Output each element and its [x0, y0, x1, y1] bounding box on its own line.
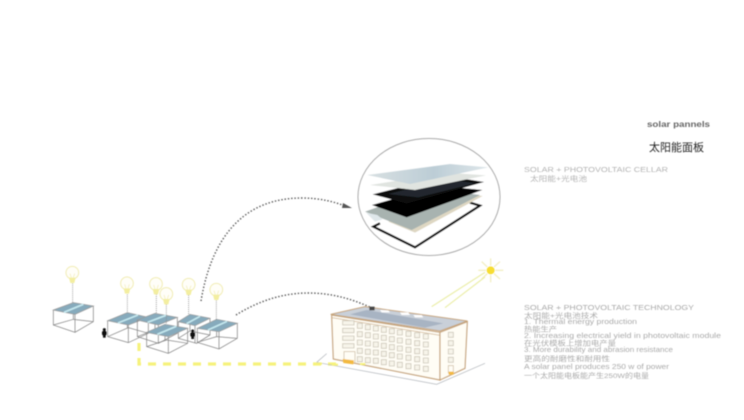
ground outline [317, 354, 485, 384]
layer: back frame [373, 203, 480, 247]
pavilion 4 [178, 291, 210, 343]
layer: glass top [367, 164, 488, 184]
text block: photovoltaic technology: 太阳能+光电池技术 [524, 311, 598, 320]
text block: photovoltaic technology: 更高的耐磨性和耐用性 [524, 354, 610, 363]
text block: photovoltaic cellar: 太阳能+光电池 [530, 174, 587, 183]
pavilion 6 [197, 300, 237, 349]
light bulbs [66, 266, 223, 304]
building with rooftop solar panels [316, 307, 485, 384]
building side facade [440, 322, 467, 380]
text block: photovoltaic technology: SOLAR + PHOTOVOLTAIC TECHNOLOGY [524, 303, 694, 312]
parapet line [332, 318, 440, 335]
text block: photovoltaic technology: A solar panel produces 250 w of power [524, 362, 670, 371]
layer: black cell 3 [372, 186, 482, 217]
windows [343, 321, 453, 371]
pavilion 3 [137, 290, 177, 343]
layer: tan backing [388, 192, 483, 233]
pavilion 1 [53, 283, 93, 332]
building roof [331, 307, 467, 331]
layer: pale sheet [370, 173, 486, 190]
layer: grey sheet [365, 188, 480, 230]
title: solar panels: 太阳能面板 [649, 140, 704, 154]
circle outline of exploded solar panel [358, 138, 500, 256]
exploded solar panel layers [365, 164, 488, 247]
pavilion 2 [108, 292, 148, 343]
pavilion 5 [147, 304, 188, 353]
doors [344, 352, 453, 373]
rooftop unit [369, 307, 375, 310]
text block: photovoltaic technology: 1. Thermal energy production [524, 317, 637, 326]
person silhouettes [102, 328, 195, 339]
text block: photovoltaic technology: 3. More durability and abrasion resistance [524, 345, 673, 354]
text block: photovoltaic cellar: SOLAR + PHOTOVOLTAIC CELLAR [524, 165, 669, 174]
yellow entrance marks [343, 359, 454, 375]
text block: photovoltaic technology: 一个太阳能电板能产生250W的电量 [524, 371, 649, 380]
arrow: dotted curve to circle [201, 198, 345, 301]
arrow: dotted curve to building [236, 293, 372, 315]
title: solar panels [647, 120, 711, 154]
arrow head: circle pointer [342, 203, 352, 208]
text block: photovoltaic technology: 2. Increasing electrical yield in photovoltaic module [524, 331, 721, 340]
building front facade [332, 315, 440, 380]
layer: black cell 2 [373, 176, 484, 203]
layer: small label sheet [366, 213, 383, 222]
yellow dashed energy line [139, 343, 336, 364]
sun with rays [432, 258, 503, 308]
text block: photovoltaic technology: 在光伏模板上增加电产量 [524, 338, 616, 348]
text block: photovoltaic cellar [524, 165, 669, 183]
layer: highlighted cell sheen [388, 179, 475, 197]
text block: photovoltaic technology [524, 303, 721, 380]
roof panels texture [350, 310, 443, 328]
text block: photovoltaic technology: 热能生产 [524, 324, 557, 334]
sunlight beams [432, 272, 485, 308]
title: solar panels: solar pannels [647, 120, 711, 129]
solar panel pavilions with light bulbs [53, 266, 237, 353]
